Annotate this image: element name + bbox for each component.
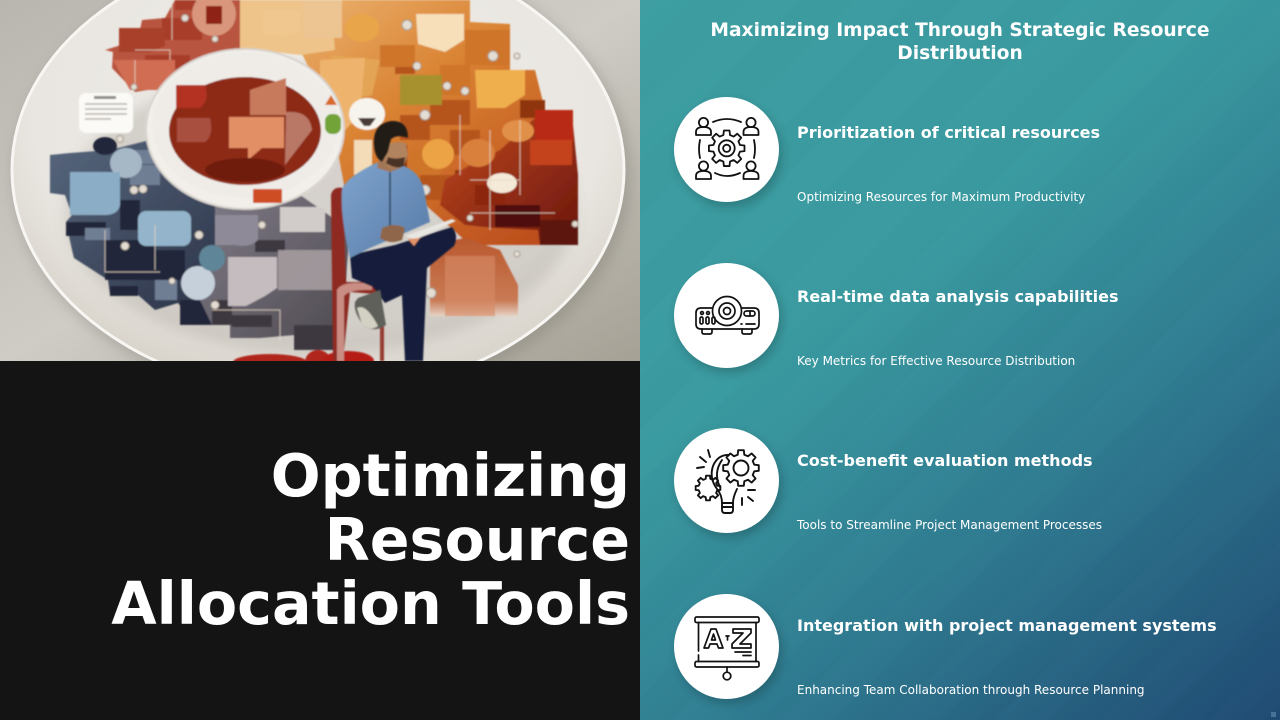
infographic map [50,0,578,374]
panel: title block [0,361,640,720]
inner plate [146,49,344,209]
panel: illustration photo [0,0,640,361]
item description: Key Metrics for Effective Resource Distribution [797,354,1075,368]
item description: Enhancing Team Collaboration through Resource Planning [797,683,1145,697]
corner mark [1271,712,1276,717]
plate [12,0,631,403]
title: Allocation Tools [111,570,630,638]
top red region [105,0,250,92]
mauve region [200,195,350,350]
orange bubbles [263,10,300,36]
item title: Cost-benefit evaluation methods [797,451,1093,470]
base disk [233,354,307,370]
heading: Maximizing Impact Through Strategic Resource Distribution [710,20,1210,64]
item title: Prioritization of critical resources [797,123,1100,142]
item title: Real-time data analysis capabilities [797,287,1119,306]
icon: A to Z presentation screen [674,594,779,699]
red right region [440,115,578,245]
title [111,442,630,638]
orange region [240,0,575,245]
item description: Tools to Streamline Project Management Processes [797,518,1102,532]
item title: Integration with project management systems [797,616,1217,635]
lower terracotta block [430,238,518,316]
item description: Optimizing Resources for Maximum Productivity [797,190,1085,204]
man on chair [322,121,456,371]
blue region [50,140,260,325]
blue bubbles [93,137,117,155]
title: Optimizing [271,442,630,510]
small nodes [116,14,578,309]
icon: light bulb with gears [674,428,779,533]
panel: strategy list [640,0,1280,720]
title: Resource [325,506,630,574]
white callout [79,93,133,133]
connector lines [105,0,555,340]
icon: projector [674,263,779,368]
icon: team around gear [674,97,779,202]
